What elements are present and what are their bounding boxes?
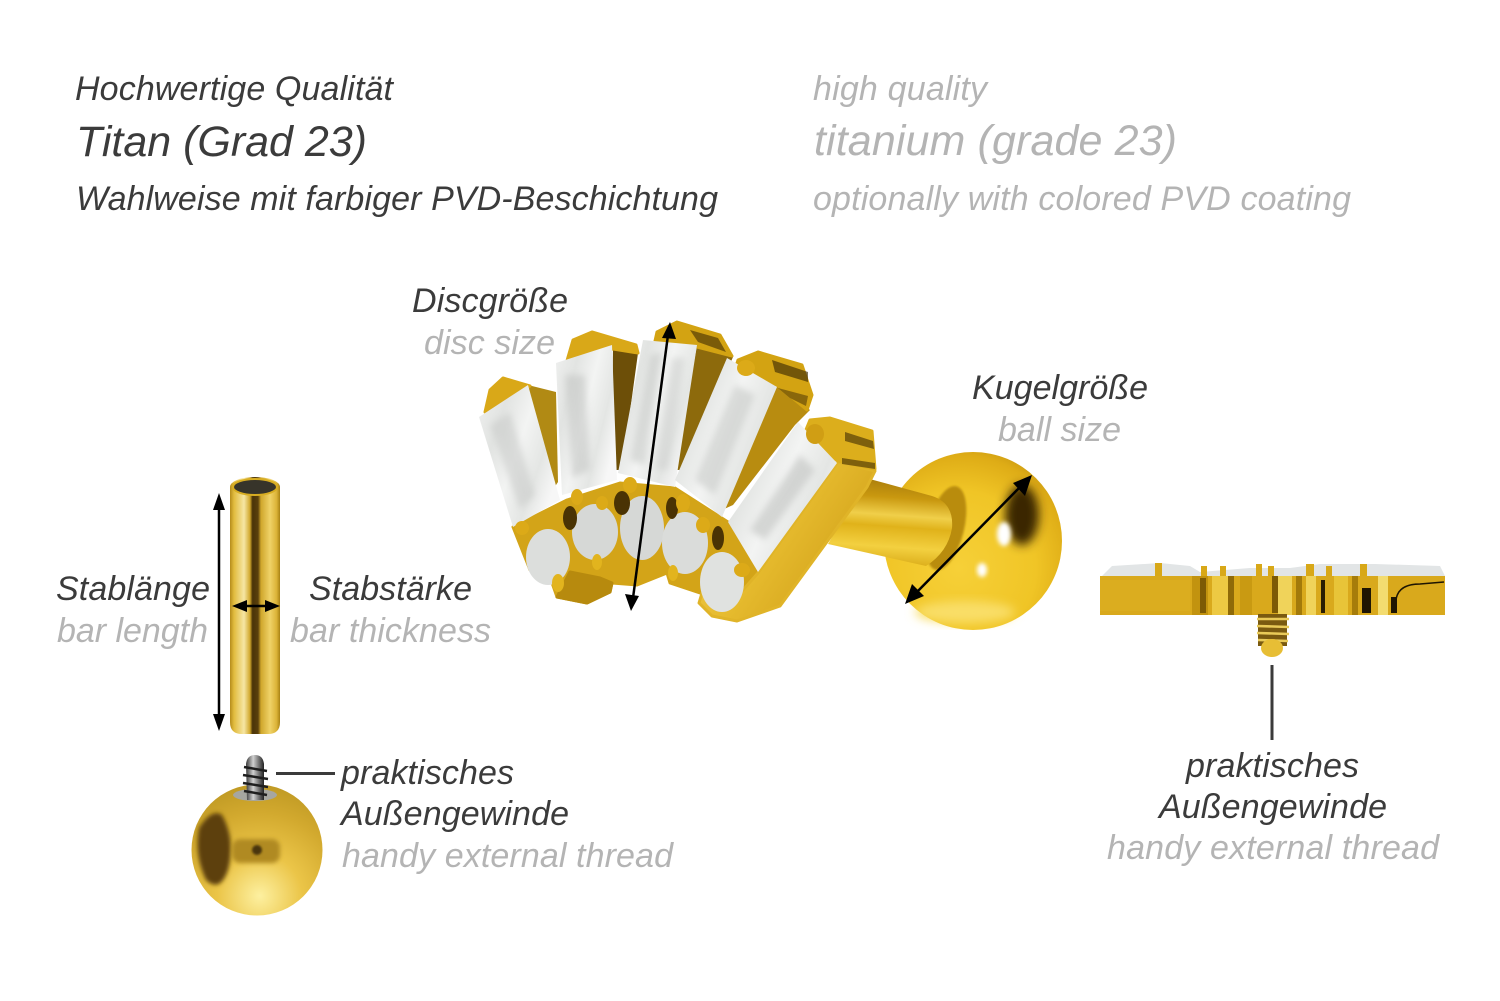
crown: baguette stones: [479, 340, 837, 572]
label: disc size: [412, 282, 568, 362]
label: ball size: Kugelgröße: [972, 369, 1148, 407]
disc edge: [1100, 576, 1445, 615]
small ball: [192, 784, 322, 916]
shaft: [828, 478, 952, 566]
label: external thread, left: handy external thread: [342, 837, 674, 875]
label: external thread, right: [1107, 747, 1440, 867]
arrow: ball size: [905, 475, 1032, 604]
bar opening: [233, 479, 277, 495]
label: bar length: [56, 570, 210, 650]
arrow: bar length: [213, 493, 225, 731]
label: external thread, left: praktisches: [340, 754, 514, 792]
heading block: English: [813, 70, 1351, 218]
label: bar thickness: bar thickness: [290, 612, 491, 650]
label: external thread, right: praktisches: [1185, 747, 1359, 785]
disc thread: [1257, 614, 1289, 657]
small thread: [243, 755, 268, 800]
label: disc size: Discgröße: [412, 282, 568, 320]
heading line: coating: Wahlweise mit farbiger PVD-Beschichtung: [76, 180, 718, 218]
label: external thread, right: Außengewinde: [1157, 788, 1387, 826]
arrow: disc size: [625, 322, 676, 611]
product: barbell with crown disc and ball: [479, 322, 1062, 630]
heading block: German: [75, 70, 718, 218]
pointer line: right thread: [1270, 665, 1274, 740]
arrow: bar thickness: [232, 600, 280, 612]
stones on top: [1102, 563, 1445, 578]
label: bar thickness: Stabstärke: [309, 570, 472, 608]
pointer line: left thread: [276, 772, 335, 775]
heading line: optional coating: optionally with colored PVD coating: [813, 180, 1351, 218]
label: disc size: disc size: [424, 324, 555, 362]
label: ball size: [972, 369, 1148, 449]
label: external thread, right: handy external thread: [1107, 829, 1440, 867]
label: bar thickness: [290, 570, 491, 650]
ball: [884, 452, 1062, 630]
internally threaded bar: [230, 477, 280, 734]
heading line: titanium: titanium (grade 23): [814, 117, 1177, 165]
heading line: high quality: high quality: [813, 70, 989, 108]
label: bar length: bar length: [57, 612, 208, 650]
label: external thread, left: Außengewinde: [339, 795, 569, 833]
heading line: material: Titan (Grad 23): [76, 118, 367, 166]
crown: gold backing: [513, 345, 810, 603]
heading line: quality: Hochwertige Qualität: [75, 70, 395, 108]
label: bar length: Stablänge: [56, 570, 210, 608]
label: external thread, left: [339, 754, 674, 875]
crown: round stones: [515, 477, 750, 612]
crown: lower right face: [699, 462, 875, 621]
threaded ball: [192, 755, 322, 916]
side view disc: [1100, 563, 1445, 657]
crown: stone caps: [485, 322, 875, 469]
label: ball size: ball size: [998, 411, 1121, 449]
